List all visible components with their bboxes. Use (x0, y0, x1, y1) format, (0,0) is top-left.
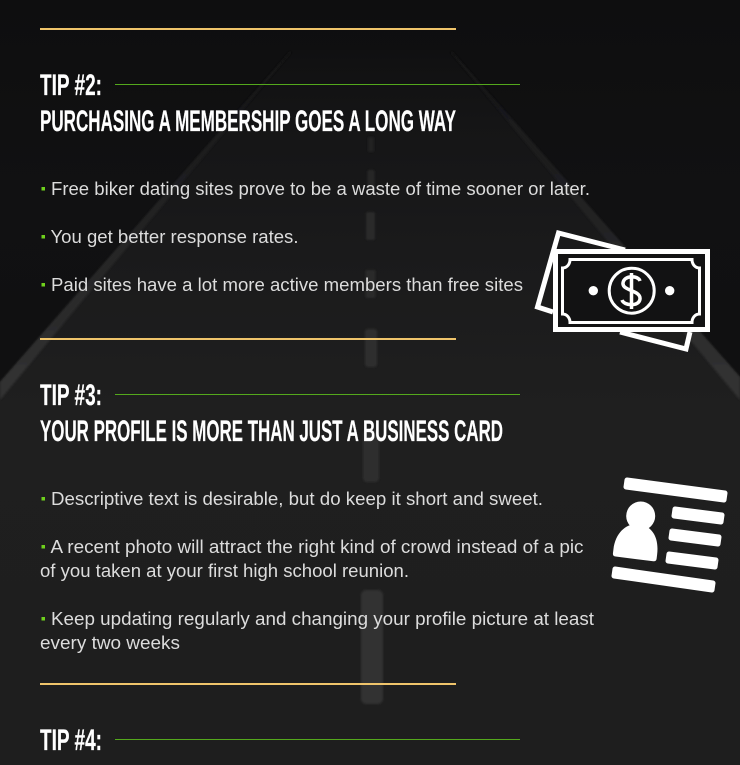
panel: tip 2 (40, 69, 708, 349)
rule: tip 3 (115, 394, 520, 395)
text block: tip 3 bullets: of you taken at your first high school reunion. (40, 560, 409, 581)
rule: tip 4 (115, 739, 520, 740)
icon: banknotes (538, 233, 708, 349)
text block: tip 2 bullets (42, 178, 590, 295)
divider: top (40, 28, 456, 30)
heading: tip 2 label: TIP #2: (40, 69, 102, 102)
divider: tip 2-3 (40, 338, 456, 340)
text block: tip 3 bullets (40, 488, 594, 653)
text block: tip 3 bullets: Keep updating regularly and changing your profile picture at least (51, 608, 594, 629)
text block: tip 3 bullets: every two weeks (40, 632, 180, 653)
text block: tip 2 bullets: Free biker dating sites prove to be a waste of time sooner or later. (51, 178, 590, 199)
heading: tip 2 title: PURCHASING A MEMBERSHIP GOES A LONG WAY (40, 105, 456, 138)
rule: tip 2 (115, 84, 520, 85)
panel: tip 3 (40, 379, 725, 653)
text block: tip 2 bullets: Paid sites have a lot more active members than free sites (51, 274, 523, 295)
text block: tip 2 bullets: You get better response rates. (50, 226, 298, 247)
heading: tip 4 label: TIP #4: (40, 724, 102, 757)
heading: tip 3 label: TIP #3: (40, 379, 102, 412)
text block: tip 3 bullets: A recent photo will attract the right kind of crowd instead of a pic (50, 536, 584, 557)
divider: tip 3-4 (40, 683, 456, 685)
icon: profile card (613, 480, 725, 590)
text block: tip 3 bullets: Descriptive text is desirable, but do keep it short and sweet. (51, 488, 543, 509)
